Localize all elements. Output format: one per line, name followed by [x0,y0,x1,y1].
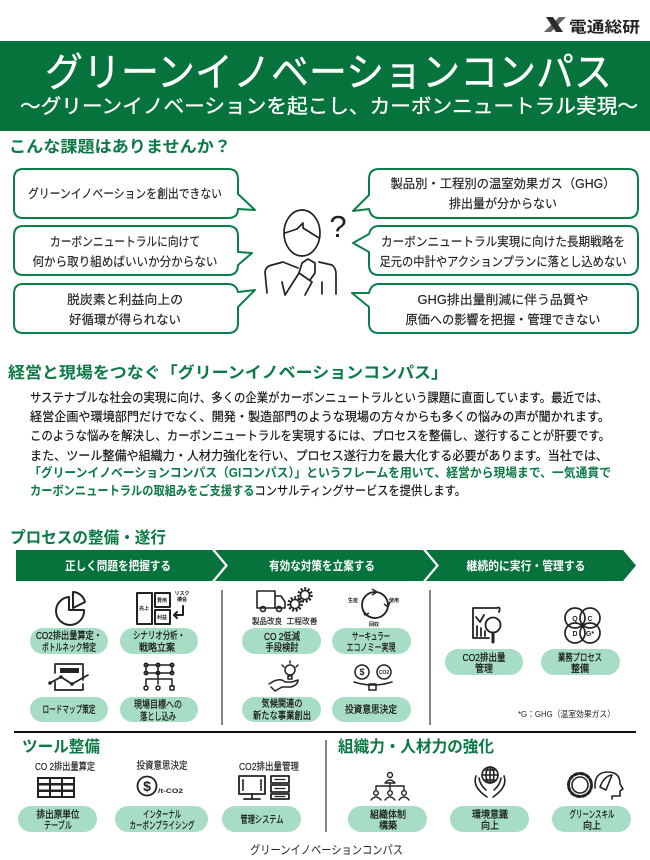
pill: co2 calc [30,628,108,654]
arrow: step 2 [215,550,436,581]
pill: co2 calc: CO2排出量算定・ [36,629,102,642]
icon: scenario matrix: 売上 [139,605,149,612]
icon: pie chart [56,592,85,625]
pill: emission factors [18,806,97,832]
icon: truck and gears: 工程改善 [286,616,318,626]
heading: tools: ツール整備 [22,738,100,756]
icon: org chart [371,772,409,800]
panel: problem bubbles left [14,169,255,333]
bubble: left 2 [14,226,252,275]
bubble: left 3: 脱炭素と利益向上の [67,292,183,307]
bubble: right 2 [353,226,638,275]
pill: scenario: シナリオ分析・ [133,629,185,642]
bubble: right 2: カーボンニュートラル実現に向けた長期戦略を [381,234,625,249]
text block: description: カーボンニュートラルの取組みをご支援するコンサルティングサービスを提供します。 [30,483,466,498]
pill: circular: エコノミー実現 [346,641,396,654]
pill: business process [541,649,620,675]
pill: site targets: 現場目標への [134,698,182,711]
pill: scenario [120,628,198,654]
icon: carbon price: $ [143,778,151,794]
icon: circular economy: 生産 [348,597,358,604]
icon: balance scale: CO2 [379,670,389,676]
pill: climate business: 新たな事業創出 [253,709,311,722]
text block: description: 経営企画や環境部門だけでなく、開発・製造部門のような現場の方々からも多くの悩みの声が聞かれます。 [30,409,610,424]
icon: QCDG circles: C [587,616,593,623]
pill: org structure: 組織体制 [370,808,406,821]
dividers [222,590,430,832]
pill: business process: 業務プロセス [558,651,602,664]
icon: roadmap [48,664,88,690]
tool labels: CO 2排出量算定 [35,760,95,773]
caption: グリーンイノベーションコンパス [250,843,403,857]
icon: scenario matrix: 費用 [157,597,167,604]
pill: green skills: 向上 [583,819,601,832]
icon: truck and gears: 製品改良 [252,616,282,626]
arrow: step 3: 継続的に実行・管理する [466,558,586,573]
title banner: グリーンイノベーションコンパス [45,51,612,95]
text block: description: このような悩みを解決し、カーボンニュートラルを実現するには、プロセスを整備し、遂行することが肝要です。 [30,428,610,443]
pill: investment decision [332,697,411,722]
pill: business process: 整備 [571,662,589,675]
arrow: step 1 [16,550,225,581]
bubble: left 2: 何から取り組めばいいか分からない [32,254,218,269]
icon: hands and globe [475,767,505,797]
icon: scenario matrix: リスク [174,590,190,597]
pill: management system [222,806,301,832]
pill: scenario: 戦略立案 [139,641,175,654]
pill: site targets: 落とし込み [140,711,176,723]
arrow: step 2: 有効な対策を立案する [269,558,375,573]
heading: process: プロセスの整備・遂行 [10,529,166,547]
pill: emission factors: 排出原単位 [36,808,80,821]
heading: concept: 経営と現場をつなぐ「グリーンイノベーションコンパス」 [8,363,448,382]
pill: emission factors: テーブル [44,819,72,832]
pill: climate business: 気候関連の [262,697,302,710]
pill: co2 management: CO2排出量 [462,651,506,664]
pill: co2 calc: ボトルネック特定 [42,642,96,654]
icon: scenario matrix: 利益 [157,614,167,621]
heading: organization: 組織力・人材力の強化 [338,737,494,756]
icon: balance scale [354,665,392,690]
pill: co2 management [445,649,523,675]
pill: circular [332,628,411,654]
icon: QCDG circles: Q [572,616,578,623]
icon: QCDG circles [565,608,600,643]
bubble: right 3 [352,284,638,333]
text block: description: 「グリーンイノベーションコンパス（GIコンパス）」というフレームを用いて、経営から現場まで、一気通貫で [29,465,611,480]
arrow: step 3 [426,550,636,581]
icon: thinking person: ? [329,209,347,244]
icon: table grid [37,777,75,798]
arrow: step 1: 正しく問題を把握する [65,558,171,573]
pill: co2 management: 管理 [475,662,493,675]
pill: internal carbon pricing: インターナル [143,809,181,821]
pill: internal carbon pricing: カーボンプライシング [130,819,194,832]
icon: QCDG circles: D [572,631,578,638]
bubble: right 1: 製品別・工程別の温室効果ガス（GHG） [390,176,616,191]
pill: management system: 管理システム [240,813,284,826]
title banner [0,41,650,131]
footnote: *G：GHG（温室効果ガス） [518,709,615,719]
icon: carbon price [138,776,183,796]
icon: gear and head [568,772,623,799]
pill: roadmap: ロードマップ策定 [42,703,96,716]
bubble: right 3: 原価への影響を把握・管理できない [406,312,600,327]
icon: circular economy: 回収 [369,621,379,628]
icon: scenario matrix [137,590,190,624]
pill: site targets [120,697,198,723]
heading: issues: こんな課題はありませんか？ [9,138,231,156]
icon: management system [239,776,289,799]
bubble: left 1 [14,169,255,218]
pill: env awareness: 向上 [481,819,499,832]
pill: env awareness [450,806,529,832]
icon: balance scale: $ [359,667,365,677]
logo: 電通総研 [569,19,640,36]
panel: problem bubbles right [352,169,638,333]
bubble: left 3: 好循環が得られない [69,312,181,327]
pill: org structure: 構築 [379,819,397,832]
tool labels: CO2排出量管理 [239,760,299,773]
pill: circular: サーキュラー [352,631,390,643]
pill: green skills [552,806,631,832]
pill: org structure [348,806,427,832]
pill: roadmap [30,697,108,722]
bubble: left 2: カーボンニュートラルに向けて [50,234,200,249]
pill: internal carbon pricing [115,806,208,832]
bubble: right 2: 足元の中計やアクションプランに落とし込めない [380,254,626,269]
pill: co2 reduction: 手段検討 [266,641,298,654]
pill: co2 reduction: CO 2低減 [264,630,300,643]
icon: carbon price: /t-CO2 [158,788,183,795]
text block: description: また、ツール整備や組織力・人材力強化を行い、プロセス遂行力を最大化する必要があります。当社では、 [30,448,608,463]
icon: QCDG circles: G* [586,631,594,638]
bubble: right 3: GHG排出量削減に伴う品質や [418,292,588,307]
tool labels [35,759,299,773]
icon: report and magnifier [473,608,500,642]
icon: thinking person [265,209,347,295]
pill: investment decision: 投資意思決定 [345,703,397,716]
icon: truck and gears [252,588,318,626]
pill: co2 reduction [242,628,321,654]
icon: circular economy [348,589,399,628]
icon: circular economy: 使用 [389,597,399,604]
bubble: left 3 [14,284,255,333]
pill: env awareness: 環境意識 [472,809,508,821]
logo [544,17,640,36]
process arrows [16,550,636,581]
pill: green skills: グリーンスキル [570,808,614,821]
bubble: right 1: 排出量が分からない [449,196,557,211]
icon: scenario matrix: 機会 [177,596,187,603]
pill: climate business [242,697,321,722]
text block: description: サステナブルな社会の実現に向け、多くの企業がカーボンニュートラルという課題に直面しています。最近では、 [30,390,608,405]
icon: hierarchy [144,663,174,690]
bubble: left 1: グリーンイノベーションを創出できない [28,187,222,201]
tool labels: 投資意思決定 [136,759,188,772]
text block: description [29,390,611,498]
bubble: right 1 [353,169,638,218]
title banner: ～グリーンイノベーションを起こし、カーボンニュートラル実現～ [20,95,638,118]
icon: hand and bulb [269,661,298,691]
